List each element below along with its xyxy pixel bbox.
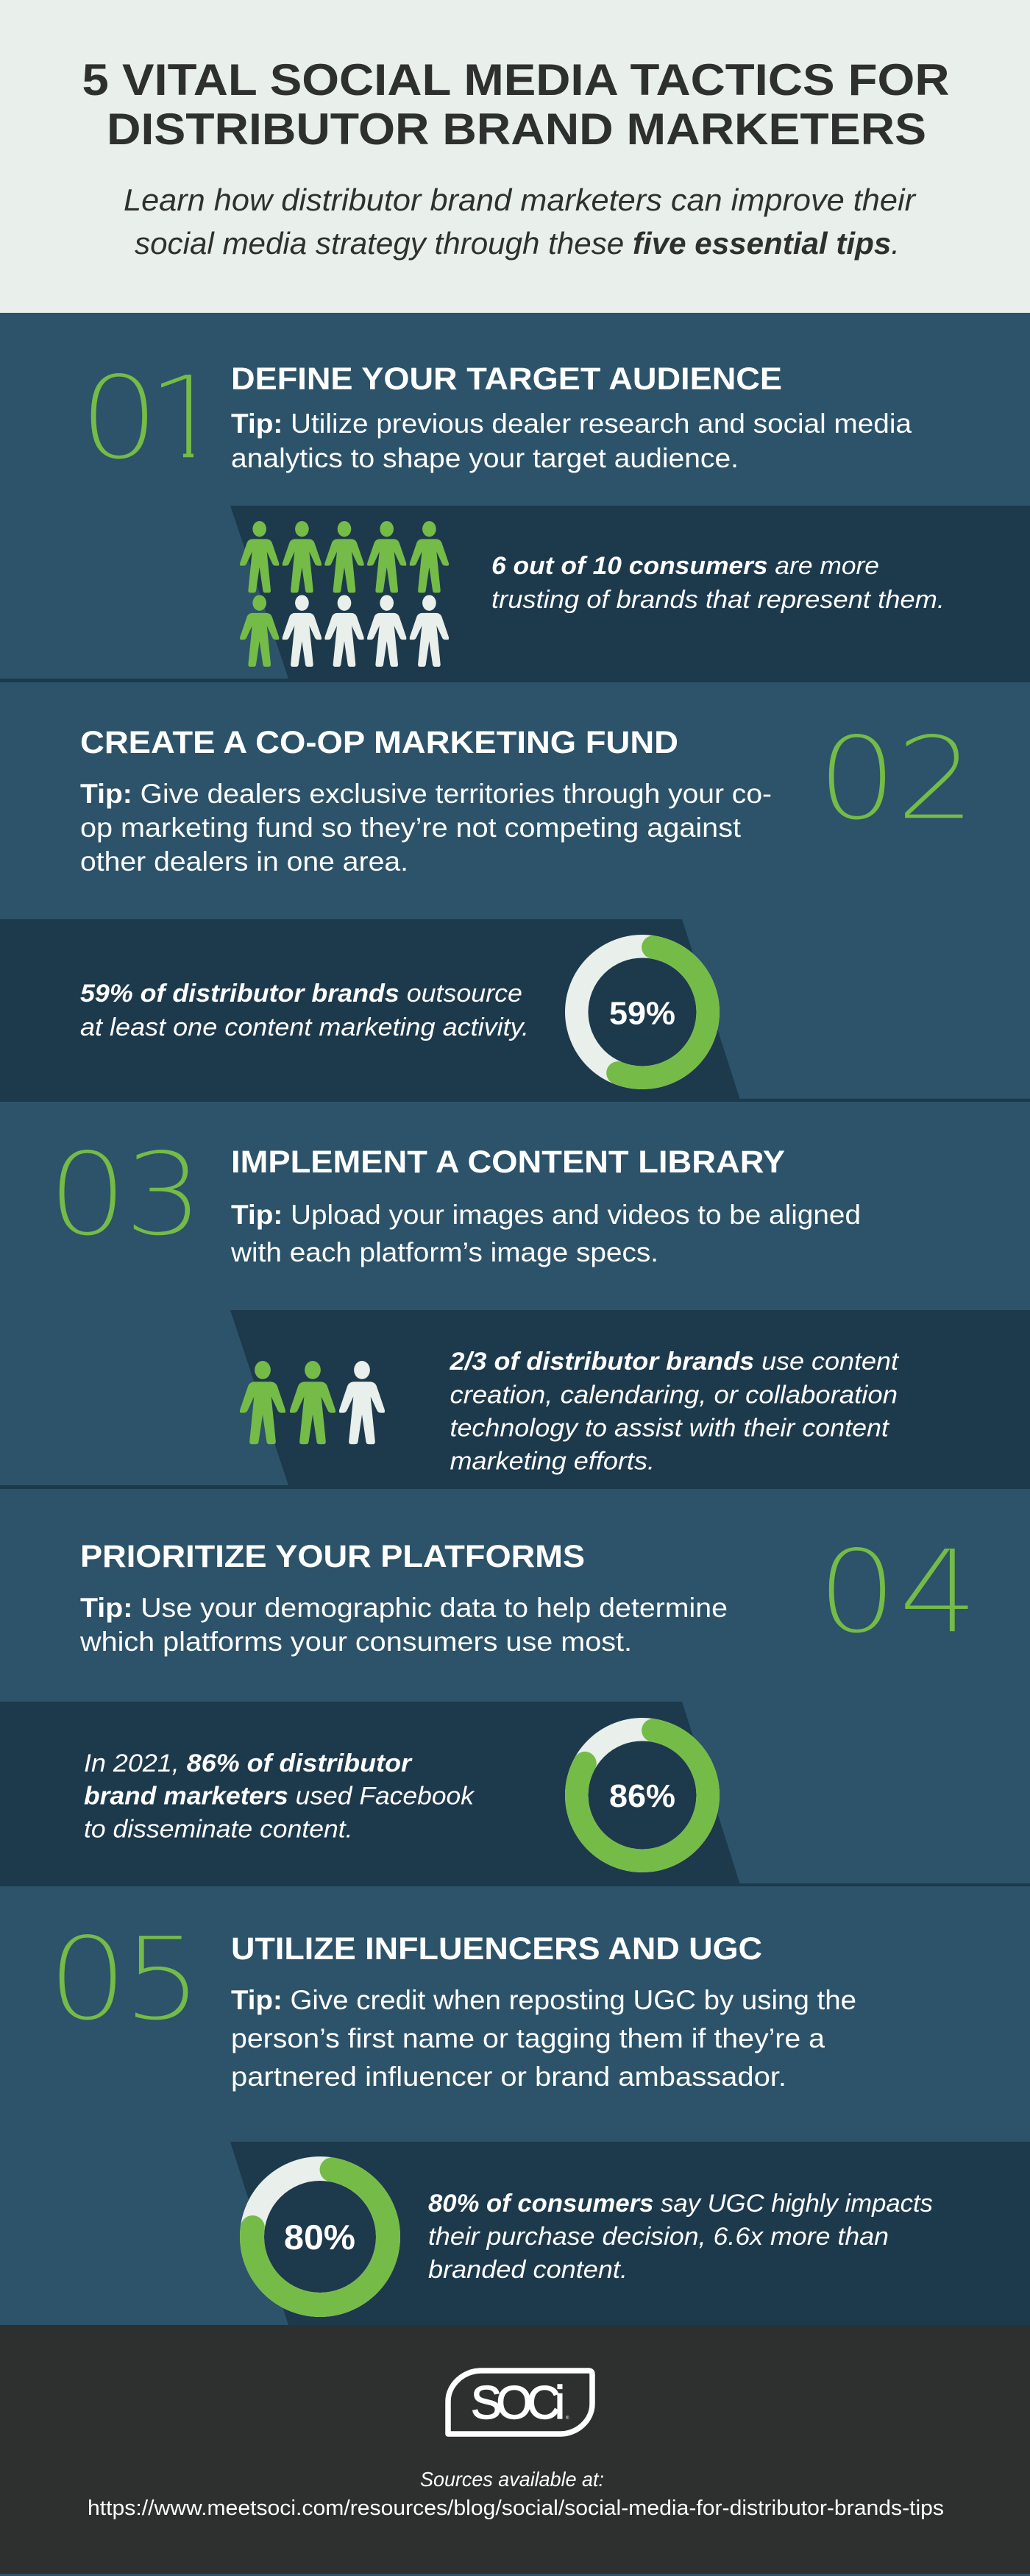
stat text 4: to disseminate content. — [84, 1815, 352, 1843]
logo: SOCi: SOCi — [471, 2377, 565, 2429]
tip 3 text: with each platform’s image specs. — [230, 1237, 658, 1267]
tip 3 text: Tip: Upload your images and videos to be aligned — [231, 1200, 861, 1230]
stat text 3: marketing efforts. — [450, 1447, 655, 1475]
tip 4 text: Tip: Use your demographic data to help determine — [80, 1593, 728, 1623]
stat text 5: their purchase decision, 6.6x more than — [428, 2223, 889, 2251]
sources url: https://www.meetsoci.com/resources/blog/social/social-media-for-distributor-brands-tips — [88, 2497, 944, 2520]
section 2: create a co-op marketing fund — [0, 682, 1030, 1102]
tip 1 text: analytics to shape your target audience. — [231, 443, 739, 473]
stat text 4 — [84, 1749, 475, 1843]
stat band 5 — [230, 2142, 1030, 2325]
tip 4 text: which platforms your consumers use most. — [79, 1627, 632, 1657]
tip 2 text: Tip: Give dealers exclusive territories through your co- — [80, 779, 772, 809]
stat text 5: 80% of consumers say UGC highly impacts — [428, 2190, 933, 2218]
tip 5 text: person’s first name or tagging them if they’re a — [231, 2023, 825, 2053]
donut chart 59% — [566, 936, 718, 1088]
tip 5 text: partnered influencer or brand ambassador. — [231, 2062, 786, 2092]
number 04: 04 — [817, 1525, 979, 1659]
heading 2: CREATE A CO-OP MARKETING FUND — [80, 725, 678, 760]
tip 2 text: other dealers in one area. — [80, 846, 408, 877]
footer panel — [0, 2325, 1030, 2574]
stat text 3: technology to assist with their content — [450, 1415, 889, 1443]
section 1: define your target audience — [0, 367, 1030, 682]
heading 5: UTILIZE INFLUENCERS AND UGC — [231, 1931, 762, 1967]
tip 4 text — [79, 1593, 728, 1657]
header panel — [0, 0, 1030, 313]
section 4: prioritize your platforms — [0, 1489, 1030, 1886]
section 5: utilize influencers and ugc — [0, 1886, 1030, 2325]
stat band 2 — [0, 919, 1030, 1102]
number 02: 02 — [817, 712, 976, 846]
stat text 4: brand marketers used Facebook — [84, 1783, 475, 1811]
tip 1 text: Tip: Utilize previous dealer research and social media — [231, 408, 912, 439]
donut chart 80% — [241, 2158, 399, 2315]
stat band 1 — [0, 506, 1030, 682]
number 03: 03 — [48, 1128, 204, 1262]
stat text 4: In 2021, 86% of distributor — [84, 1749, 413, 1777]
stat text 2: 59% of distributor brands outsource — [80, 980, 522, 1008]
tip 1 text — [231, 408, 912, 473]
logo: SOCi: ® — [566, 2416, 569, 2421]
tip 2 text — [80, 779, 772, 877]
icon: ten people, six highlighted — [240, 521, 449, 667]
logo: SOCi — [448, 2371, 592, 2434]
subtitle: social media strategy through these five essential tips. — [135, 226, 900, 261]
tip 5 text — [231, 1985, 856, 2092]
donut chart 80%: 80% — [284, 2218, 355, 2257]
stat text 3: creation, calendaring, or collaboration — [450, 1381, 898, 1409]
heading 1: DEFINE YOUR TARGET AUDIENCE — [231, 361, 782, 397]
number 05: 05 — [48, 1912, 202, 2046]
tip 5 text: Tip: Give credit when reposting UGC by using the — [231, 1985, 856, 2015]
stat text 5 — [428, 2190, 933, 2284]
stat text 1: trusting of brands that represent them. — [491, 586, 945, 614]
donut chart 86% — [566, 1719, 718, 1871]
donut chart 86%: 86% — [609, 1778, 675, 1814]
title: 5 VITAL SOCIAL MEDIA TACTICS FOR — [82, 55, 949, 105]
stat text 3: 2/3 of distributor brands use content — [449, 1348, 899, 1376]
title — [82, 55, 949, 154]
heading 3: IMPLEMENT A CONTENT LIBRARY — [231, 1144, 785, 1180]
stat text 2 — [80, 980, 529, 1041]
icon: three people, two highlighted — [240, 1361, 385, 1444]
subtitle: Learn how distributor brand marketers can improve their — [124, 183, 917, 217]
stat text 1: 6 out of 10 consumers are more — [491, 552, 879, 580]
tip 3 text — [230, 1200, 861, 1267]
number 01: 01 — [79, 351, 227, 485]
title: DISTRIBUTOR BRAND MARKETERS — [107, 105, 926, 154]
stat band 4 — [0, 1702, 1030, 1886]
stat band 3 — [0, 1310, 1030, 1489]
stat text 5: branded content. — [428, 2256, 628, 2284]
stat text 2: at least one content marketing activity. — [80, 1013, 529, 1041]
subtitle — [124, 183, 917, 261]
tip 2 text: op marketing fund so they’re not competing against — [80, 813, 742, 843]
stat text 1 — [491, 552, 945, 614]
section 3: implement a content library — [0, 1102, 1030, 1489]
sources label: Sources available at: — [420, 2468, 604, 2491]
donut chart 59%: 59% — [609, 995, 675, 1032]
heading 4: PRIORITIZE YOUR PLATFORMS — [80, 1539, 585, 1574]
stat text 3 — [449, 1348, 899, 1475]
